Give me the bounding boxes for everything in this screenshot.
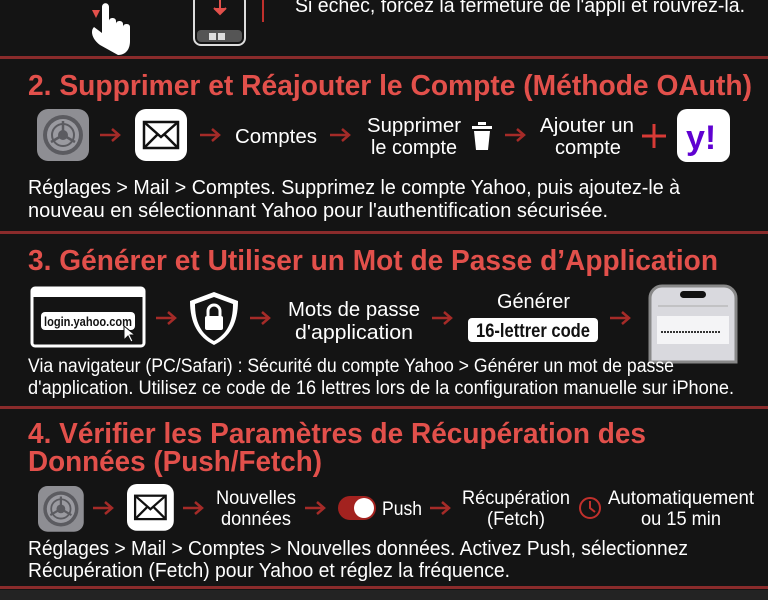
icon row 2: Supprimer	[367, 115, 461, 137]
icon row 4: données	[221, 509, 291, 530]
icon row 3: d'application	[295, 322, 413, 344]
icon row 4	[38, 484, 755, 532]
icon: phone	[194, 0, 245, 45]
heading 4: 4. Vérifier les Paramètres de Récupération des	[28, 418, 646, 450]
icon row 4: Récupération	[462, 488, 570, 509]
icon row 4: Nouvelles	[216, 488, 296, 509]
icon row 3	[32, 286, 736, 362]
icon row 2: compte	[555, 137, 621, 159]
icon row 2: le compte	[371, 137, 457, 159]
section 1 fragment	[92, 0, 745, 55]
icon row 2: Comptes	[235, 126, 317, 148]
icon row 3: Mots de passe	[288, 299, 420, 321]
icon row 4: ou 15 min	[641, 509, 721, 530]
icon row 4: (Fetch)	[487, 509, 545, 530]
icon row 3: 16-lettrer code	[476, 321, 590, 342]
icon row 3: Générer	[497, 291, 570, 313]
red line	[262, 0, 264, 22]
icon: hand tap	[92, 3, 130, 55]
panel: section 3: d'application. Utilisez ce code de 16 lettres lors de la configuration manuelle sur iPhone.	[28, 378, 734, 399]
icon row 4: Push	[382, 499, 422, 520]
panel: section 4: Récupération (Fetch) pour Yahoo et réglez la fréquence.	[28, 560, 510, 582]
panel: section 2: nouveau en sélectionnant Yahoo pour l'authentification sécurisée.	[28, 200, 608, 222]
icon row 2: Ajouter un	[540, 115, 634, 137]
text: section 3 description: Via navigateur (PC/Safari) : Sécurité du compte Yahoo > Générer un mot de passe	[28, 356, 674, 377]
heading 3: 3. Générer et Utiliser un Mot de Passe d’Application	[28, 245, 718, 277]
text: section 2 description: Réglages > Mail > Comptes. Supprimez le compte Yahoo, puis ajoutez-le à	[28, 177, 681, 199]
panel: section 3	[28, 245, 736, 399]
icon row 4: Automatiquement	[608, 488, 755, 509]
icon row 2	[37, 109, 730, 162]
icon row 3: login.yahoo.com	[44, 314, 132, 329]
text: section 4 description: Réglages > Mail > Comptes > Nouvelles données. Activez Push, sélectionnez	[28, 538, 688, 560]
panel: section 4	[28, 418, 755, 582]
heading 2: 2. Supprimer et Réajouter le Compte (Méthode OAuth)	[28, 70, 752, 102]
icon row 2: y!	[686, 119, 716, 157]
panel: section 4: Données (Push/Fetch)	[28, 446, 322, 478]
panel: section 2	[28, 70, 752, 222]
